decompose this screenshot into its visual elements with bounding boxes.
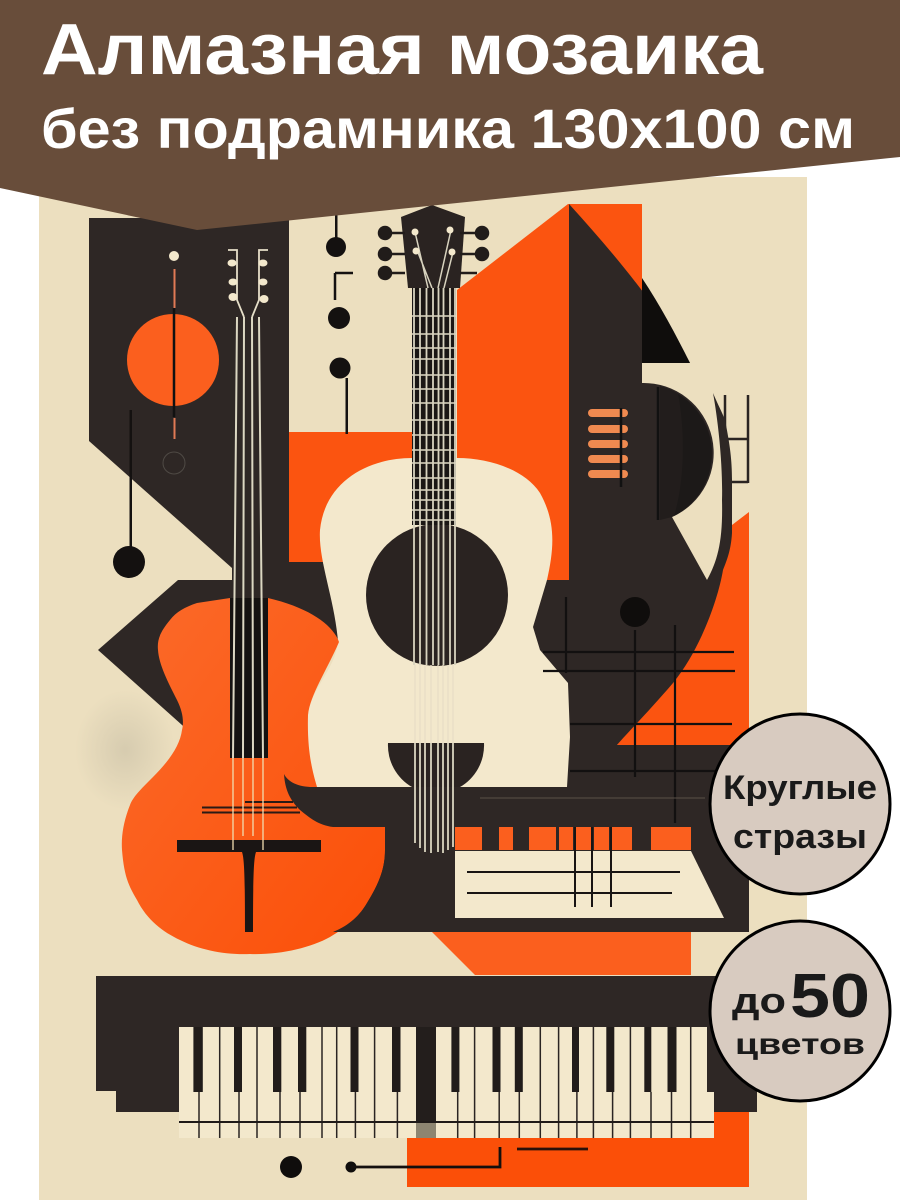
string pins (412, 226, 456, 256)
painting (39, 177, 807, 1200)
electric guitar strings (233, 317, 263, 758)
orange keys (455, 827, 691, 850)
faint orange ticks (174, 269, 176, 439)
head strings (415, 230, 453, 288)
speckle haze (75, 690, 175, 810)
orange electric guitar body (122, 598, 385, 954)
key gap (416, 1027, 436, 1122)
key lines (199, 1027, 691, 1138)
banner shape (0, 0, 900, 230)
right key notch (707, 1027, 714, 1092)
orange lower band (432, 932, 691, 975)
canvas background (39, 177, 807, 1200)
white keys (179, 1027, 714, 1138)
faint circle (163, 452, 185, 474)
title line 2: без подрамника 130х100 см (41, 97, 855, 160)
badge: round rhinestones: Круглые (723, 769, 877, 807)
cream trapezoid (455, 851, 724, 918)
cream acoustic guitar body (308, 458, 570, 787)
badge: round rhinestones (710, 714, 890, 894)
grid lines (543, 597, 735, 823)
bridge T (177, 840, 321, 932)
sound hole (366, 524, 508, 666)
tuning pegs (379, 227, 488, 279)
grid circle (620, 597, 650, 627)
badge: round rhinestones: стразы (733, 818, 867, 856)
tail of dark block (284, 774, 400, 932)
bottom dash (517, 1148, 588, 1150)
bridge bowl (388, 743, 484, 787)
electric head (228, 250, 268, 317)
orange back panel (457, 204, 642, 580)
badge: up to 50 colours: 50 (790, 962, 870, 1031)
tower lines (621, 387, 658, 520)
body lines (202, 802, 300, 812)
headstock (401, 205, 465, 288)
trapezoid lines (467, 827, 680, 907)
orange circle (127, 314, 219, 406)
guitar neck (412, 288, 456, 525)
badge: up to 50 colours: до (732, 980, 786, 1021)
frets (412, 316, 456, 520)
badge: up to 50 colours (710, 921, 890, 1101)
orange bottom block (407, 1112, 749, 1187)
electric pegs (228, 260, 268, 303)
bottom note line (346, 1147, 500, 1172)
electric neck (230, 598, 268, 758)
circle lines (173, 308, 175, 417)
ladder lines (725, 395, 748, 483)
title line 1: Алмазная мозаика (41, 10, 764, 90)
dark lower block with crescent (313, 393, 749, 932)
dark tower (569, 204, 714, 580)
badge: up to 50 colours: цветов (735, 1028, 865, 1061)
white dot (169, 251, 179, 261)
header banner (0, 0, 900, 230)
bottom note dot (280, 1156, 302, 1178)
orange pills (588, 409, 628, 478)
orange rectangle behind guitar (289, 432, 413, 562)
orange right triangle (617, 512, 749, 745)
piano body (96, 976, 757, 1112)
dark left panel (89, 218, 339, 770)
piano (96, 976, 757, 1138)
black keys (193, 1027, 676, 1092)
acoustic strings (414, 288, 455, 665)
hanging notes (113, 210, 353, 578)
